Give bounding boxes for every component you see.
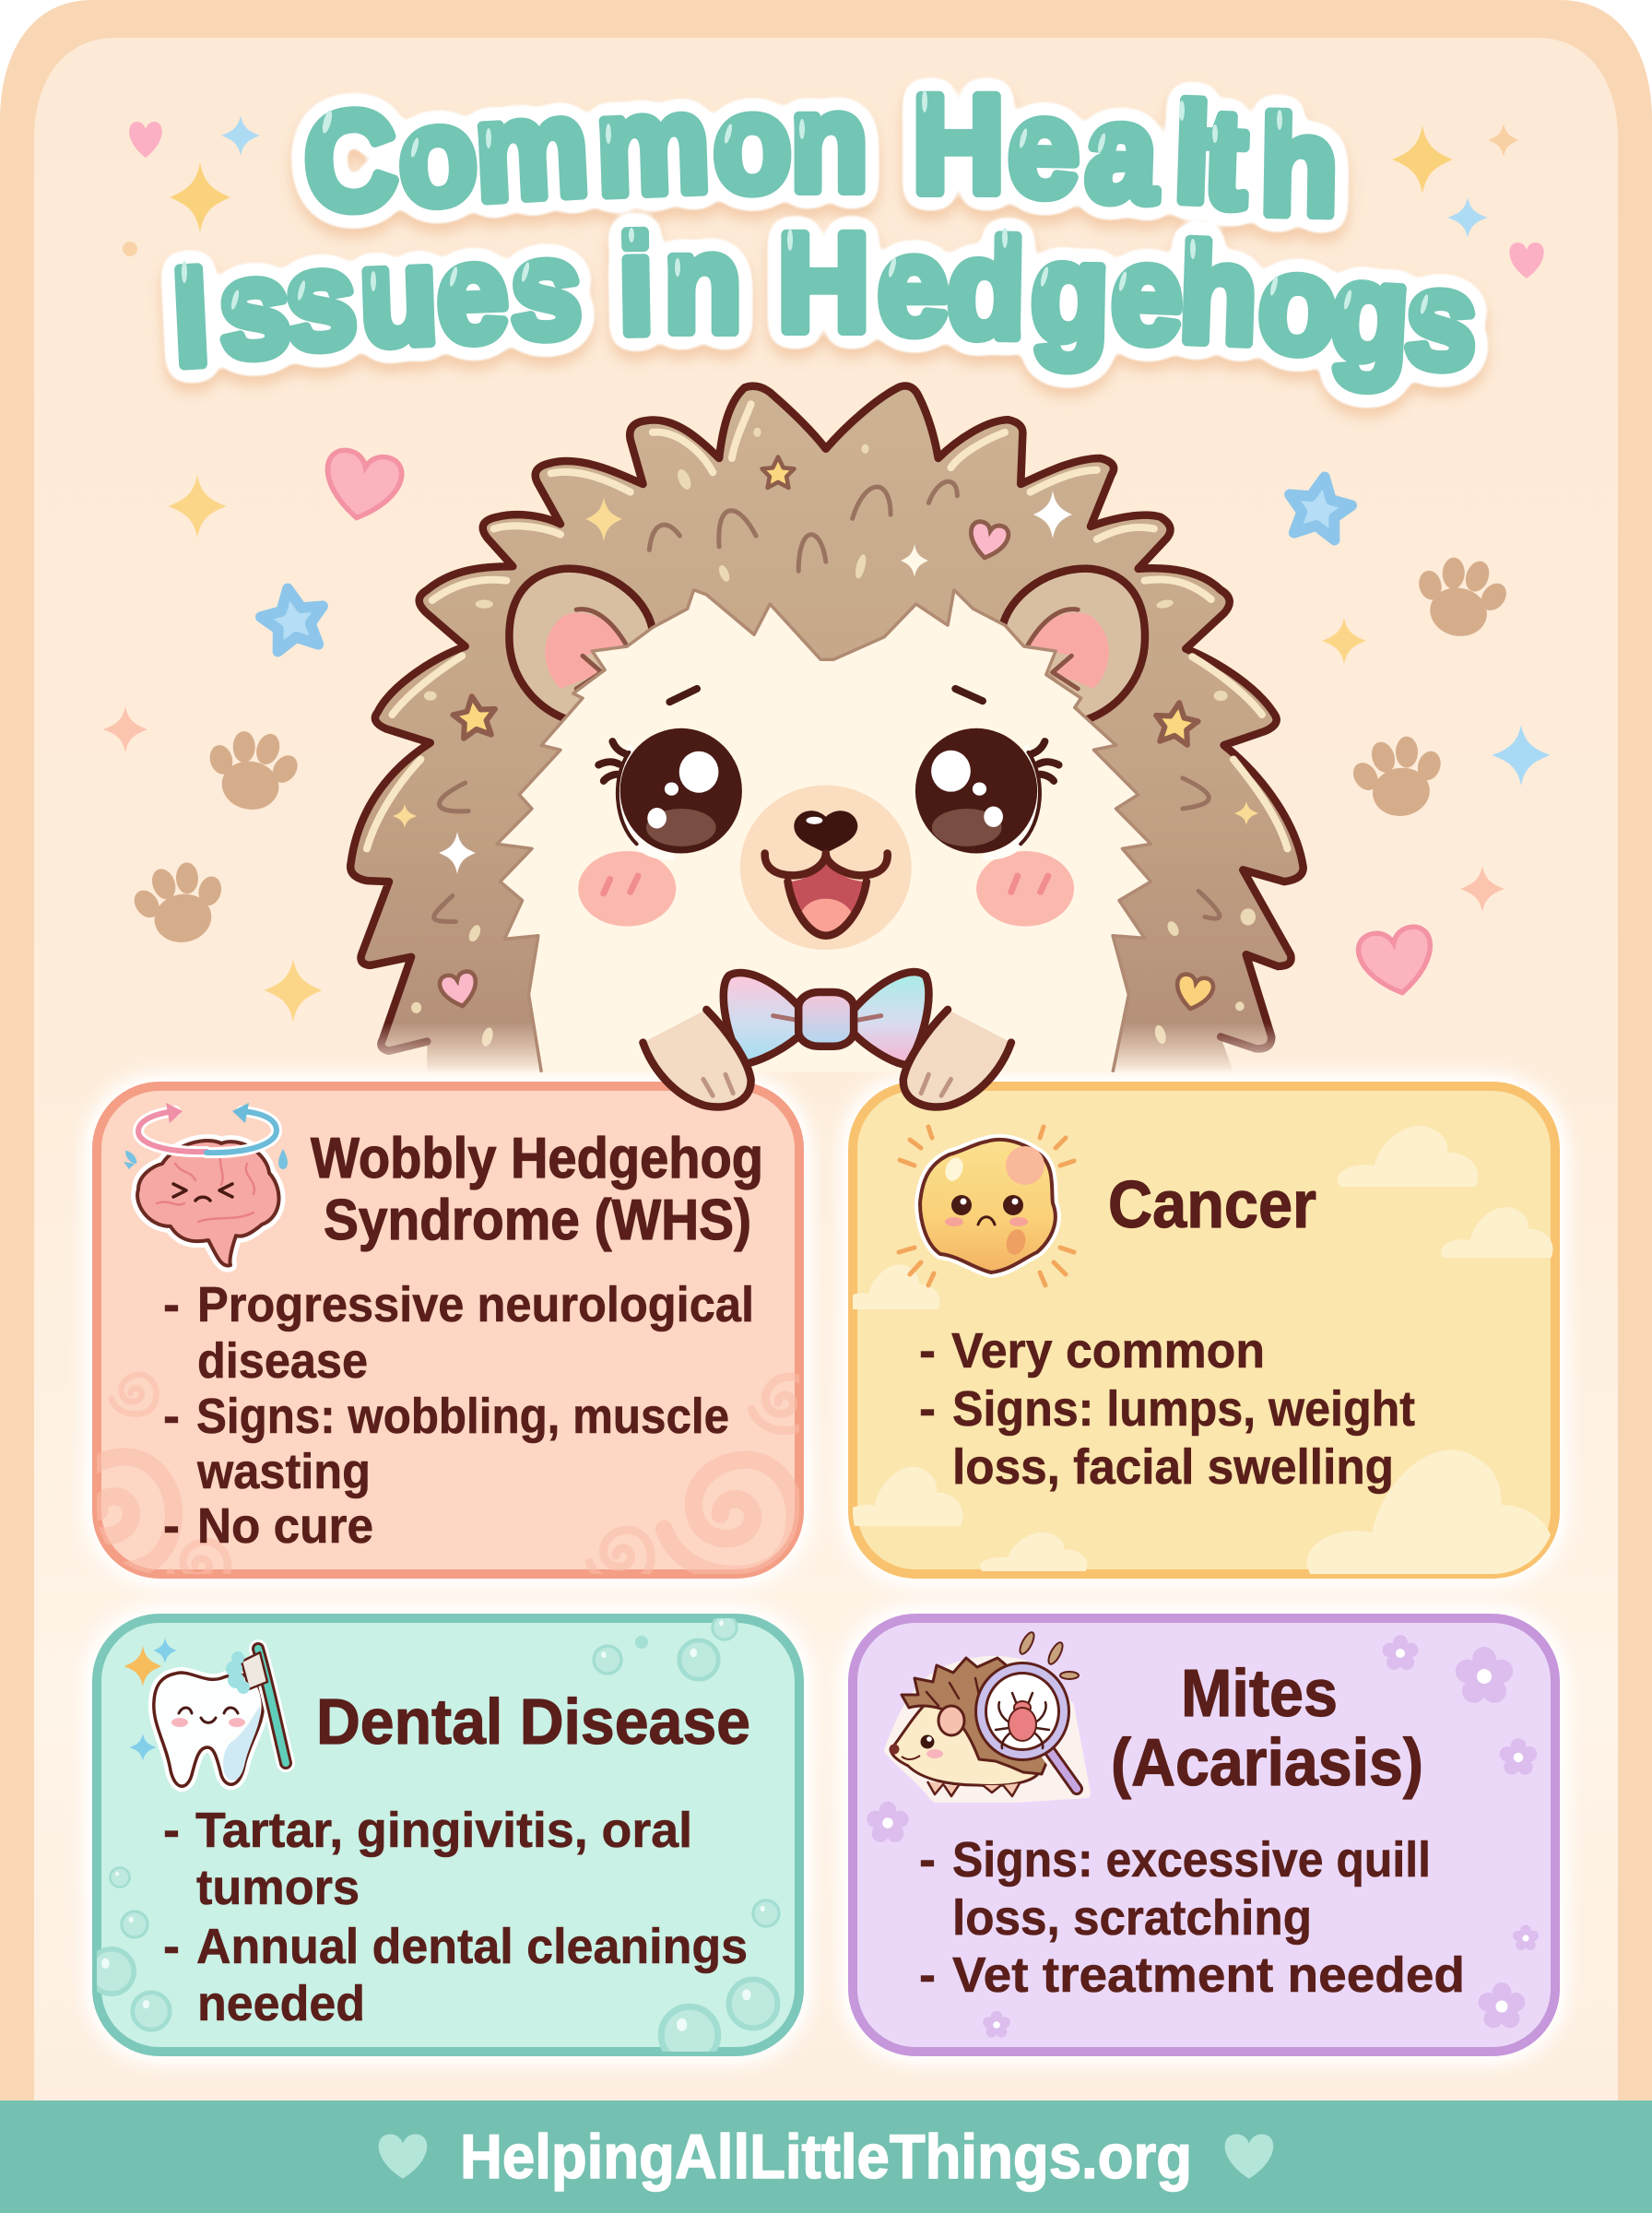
panel: mites [853, 1618, 1555, 2052]
body text: Signs: wobbling, muscle [196, 1389, 729, 1444]
body text: - [919, 1947, 936, 2003]
heading [311, 1127, 763, 1252]
body text: Signs: excessive quill [952, 1832, 1431, 1888]
eyes [598, 689, 1059, 858]
icon: footer heart left [379, 2134, 427, 2179]
face fur [497, 590, 1150, 1072]
heading: Mites [1181, 1657, 1338, 1731]
body text: - [163, 1498, 180, 1554]
website url: HelpingAllLittleThings.org [460, 2122, 1192, 2192]
cheeks [578, 851, 1074, 927]
heading: Wobbly Hedgehog [311, 1127, 763, 1190]
body text: - [919, 1832, 936, 1888]
icon: smiling tooth and toothbrush [124, 1638, 286, 1786]
body text: - [919, 1381, 936, 1437]
body text [919, 1832, 1465, 2003]
heading: Syndrome (WHS) [324, 1189, 751, 1252]
icon: sad lump [899, 1127, 1074, 1285]
title: Common Health [301, 65, 1339, 244]
body text: needed [197, 1976, 365, 2031]
hedgehog mascot [350, 386, 1304, 1107]
body text: Signs: lumps, weight [952, 1381, 1415, 1437]
panel: cancer [844, 1086, 1555, 1577]
heading: Dental Disease [316, 1686, 750, 1757]
heading: (Acariasis) [1111, 1726, 1423, 1800]
body text: Tartar, gingivitis, oral [195, 1803, 692, 1858]
heading: Cancer [1108, 1168, 1316, 1242]
body text: Very common [951, 1323, 1265, 1379]
body text: - [163, 1919, 180, 1974]
body text [163, 1277, 754, 1554]
body text: Annual dental cleanings [196, 1919, 748, 1974]
body text: - [163, 1803, 180, 1858]
body text: Vet treatment needed [952, 1947, 1465, 2003]
body text [919, 1323, 1415, 1495]
title: Issues in Hedgehogs [170, 206, 1481, 399]
heading [1111, 1657, 1423, 1800]
title [170, 65, 1481, 399]
quill decorations [393, 457, 1258, 1012]
body text: - [919, 1323, 936, 1379]
footer bar [0, 2101, 1652, 2213]
body text: wasting [196, 1444, 371, 1499]
body text: - [163, 1389, 180, 1444]
muzzle [740, 786, 912, 950]
hedgehog quills [350, 386, 1304, 1072]
decorative stars, hearts and paws [103, 447, 1551, 1022]
body text: loss, scratching [952, 1890, 1312, 1946]
icon: footer heart right [1225, 2134, 1273, 2179]
ears [509, 569, 1145, 719]
panel: wobbly hedgehog syndrome [42, 1086, 813, 1592]
body text: No cure [197, 1498, 373, 1554]
body text: loss, facial swelling [952, 1439, 1394, 1495]
body text: tumors [196, 1860, 360, 1915]
body text: - [163, 1277, 180, 1332]
title gloss highlights [182, 90, 1430, 314]
panel: dental disease [89, 1615, 799, 2064]
nose and mouth [765, 811, 888, 936]
body text: Progressive neurological [197, 1277, 754, 1332]
body text [163, 1803, 748, 2031]
body text: disease [197, 1333, 368, 1389]
bow tie [724, 972, 928, 1065]
paws [643, 1010, 1011, 1107]
title sparkles and hearts [123, 115, 1544, 278]
icon: hedgehog with magnifying glass and mite [889, 1630, 1086, 1798]
icon: dizzy brain [124, 1103, 288, 1266]
